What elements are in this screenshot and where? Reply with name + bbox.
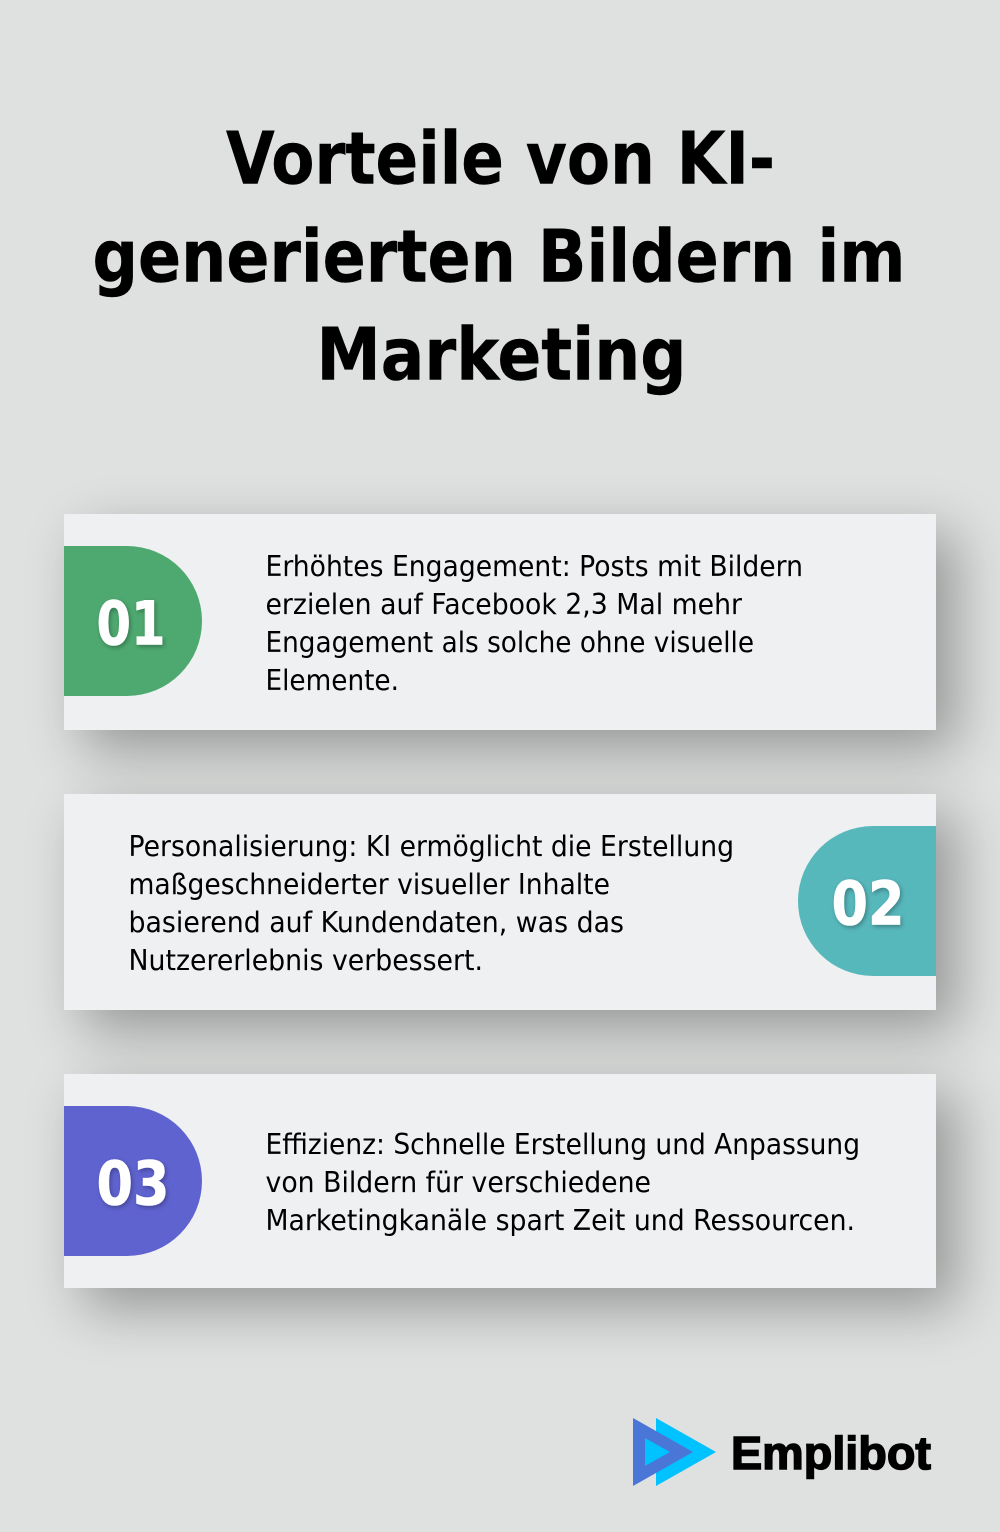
badge: 02 xyxy=(798,826,936,976)
text: Personalisierung: basierend auf Kundendaten, was das xyxy=(128,905,624,939)
card 3 background xyxy=(64,1074,936,1288)
number: 02: 02 xyxy=(832,868,904,940)
text: Personalisierung: Personalisierung: KI ermöglicht die Erstellung xyxy=(128,829,734,863)
logo: Emplibot xyxy=(633,1418,931,1486)
text: Erhöhtes Engagement: Erhöhtes Engagement: Posts mit Bildern xyxy=(266,549,803,583)
text: Personalisierung: Nutzererlebnis verbessert. xyxy=(128,943,483,977)
title: Vorteile von KI- xyxy=(226,116,775,200)
text: Effizienz: Effizienz: Schnelle Erstellung und Anpassung xyxy=(266,1127,860,1161)
text: Effizienz xyxy=(266,1127,860,1237)
number: 03: 03 xyxy=(96,1148,170,1220)
text: Erhöhtes Engagement: Engagement als solche ohne visuelle xyxy=(266,625,754,659)
icon: play triangles xyxy=(633,1418,716,1486)
text: Personalisierung: maßgeschneiderter visueller Inhalte xyxy=(128,867,610,901)
text: Erhöhtes Engagement xyxy=(266,549,803,697)
title: Marketing xyxy=(316,312,686,396)
title xyxy=(92,116,906,396)
panel: item 02 xyxy=(128,826,936,977)
number: 01: 01 xyxy=(96,588,166,660)
text: Effizienz: Marketingkanäle spart Zeit und Ressourcen. xyxy=(266,1203,855,1237)
badge: 03 xyxy=(64,1106,202,1256)
badge: 01 xyxy=(64,546,202,696)
wordmark: Emplibot xyxy=(731,1427,931,1479)
card 1 background xyxy=(64,514,936,730)
text: Erhöhtes Engagement: Elemente. xyxy=(266,663,399,697)
card 2 background xyxy=(64,794,936,1010)
panel: item 03 xyxy=(64,1106,860,1256)
text: Effizienz: von Bildern für verschiedene xyxy=(266,1165,651,1199)
text: Erhöhtes Engagement: erzielen auf Facebook 2,3 Mal mehr xyxy=(266,587,742,621)
text: Personalisierung xyxy=(128,829,734,977)
title: generierten Bildern im xyxy=(92,214,906,298)
panel: item 01 xyxy=(64,546,803,697)
